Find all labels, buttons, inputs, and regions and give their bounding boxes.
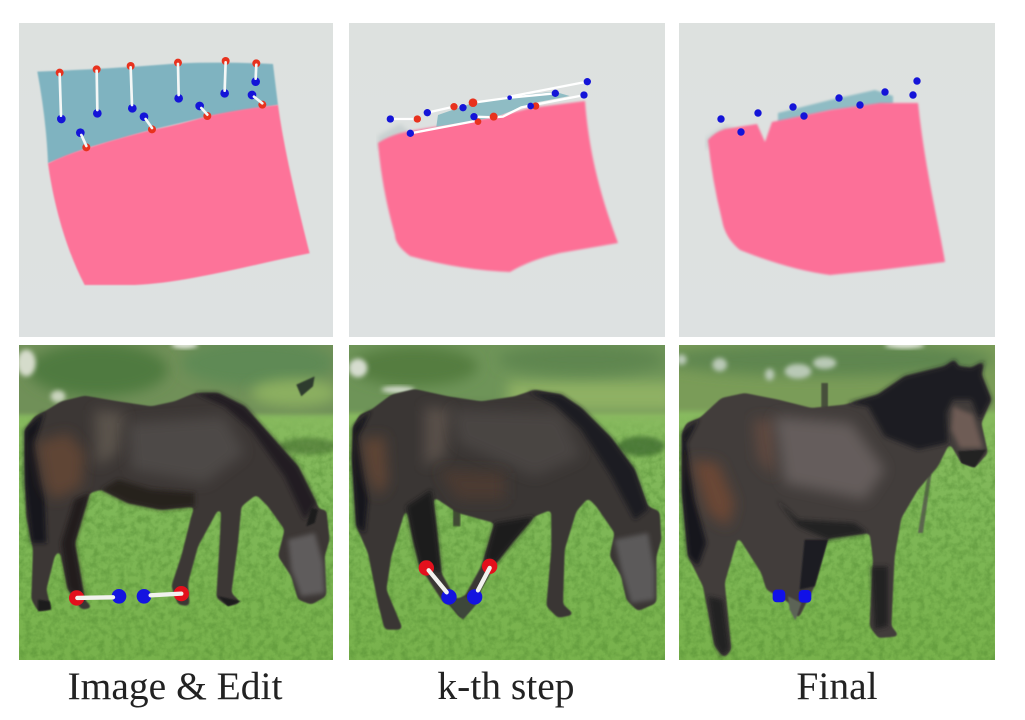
edit arrows on hooves: [69, 586, 189, 606]
sheet pink lower part: [48, 105, 310, 285]
panel: horse, k-th step: [341, 336, 675, 663]
sheet teal remainder: [778, 90, 893, 123]
panel: sheet, image and edit: [19, 23, 333, 337]
horse with legs moving together: [352, 389, 661, 630]
sheet teal upper part: [37, 63, 278, 163]
sheet pink body: [378, 101, 618, 272]
tree background: [661, 336, 1005, 533]
sheet left smudge: [706, 125, 735, 150]
target points: [773, 590, 811, 603]
caption: Final: Final: [796, 664, 878, 708]
sheet pink body: [708, 103, 945, 275]
tree background: [11, 336, 345, 455]
panel: horse, image and edit: [11, 336, 345, 663]
horse grazing: [25, 393, 330, 611]
panel: sheet, final: [679, 23, 995, 337]
sheet left smudge: [378, 124, 410, 150]
caption: k-th step: k-th step: [437, 664, 575, 708]
caption: Image & Edit: Image & Edit: [68, 664, 283, 708]
panel: horse, final: [679, 345, 995, 660]
panel: sheet, k-th step: [349, 23, 665, 337]
edit arrows: [387, 78, 591, 137]
target points: [717, 77, 921, 136]
horse standing with head raised: [682, 360, 991, 658]
tree background: [341, 336, 675, 526]
sheet teal remainder: [436, 92, 570, 127]
edit arrows on hooves: [419, 559, 497, 605]
edit arrows: red handles to blue targets: [56, 57, 266, 151]
